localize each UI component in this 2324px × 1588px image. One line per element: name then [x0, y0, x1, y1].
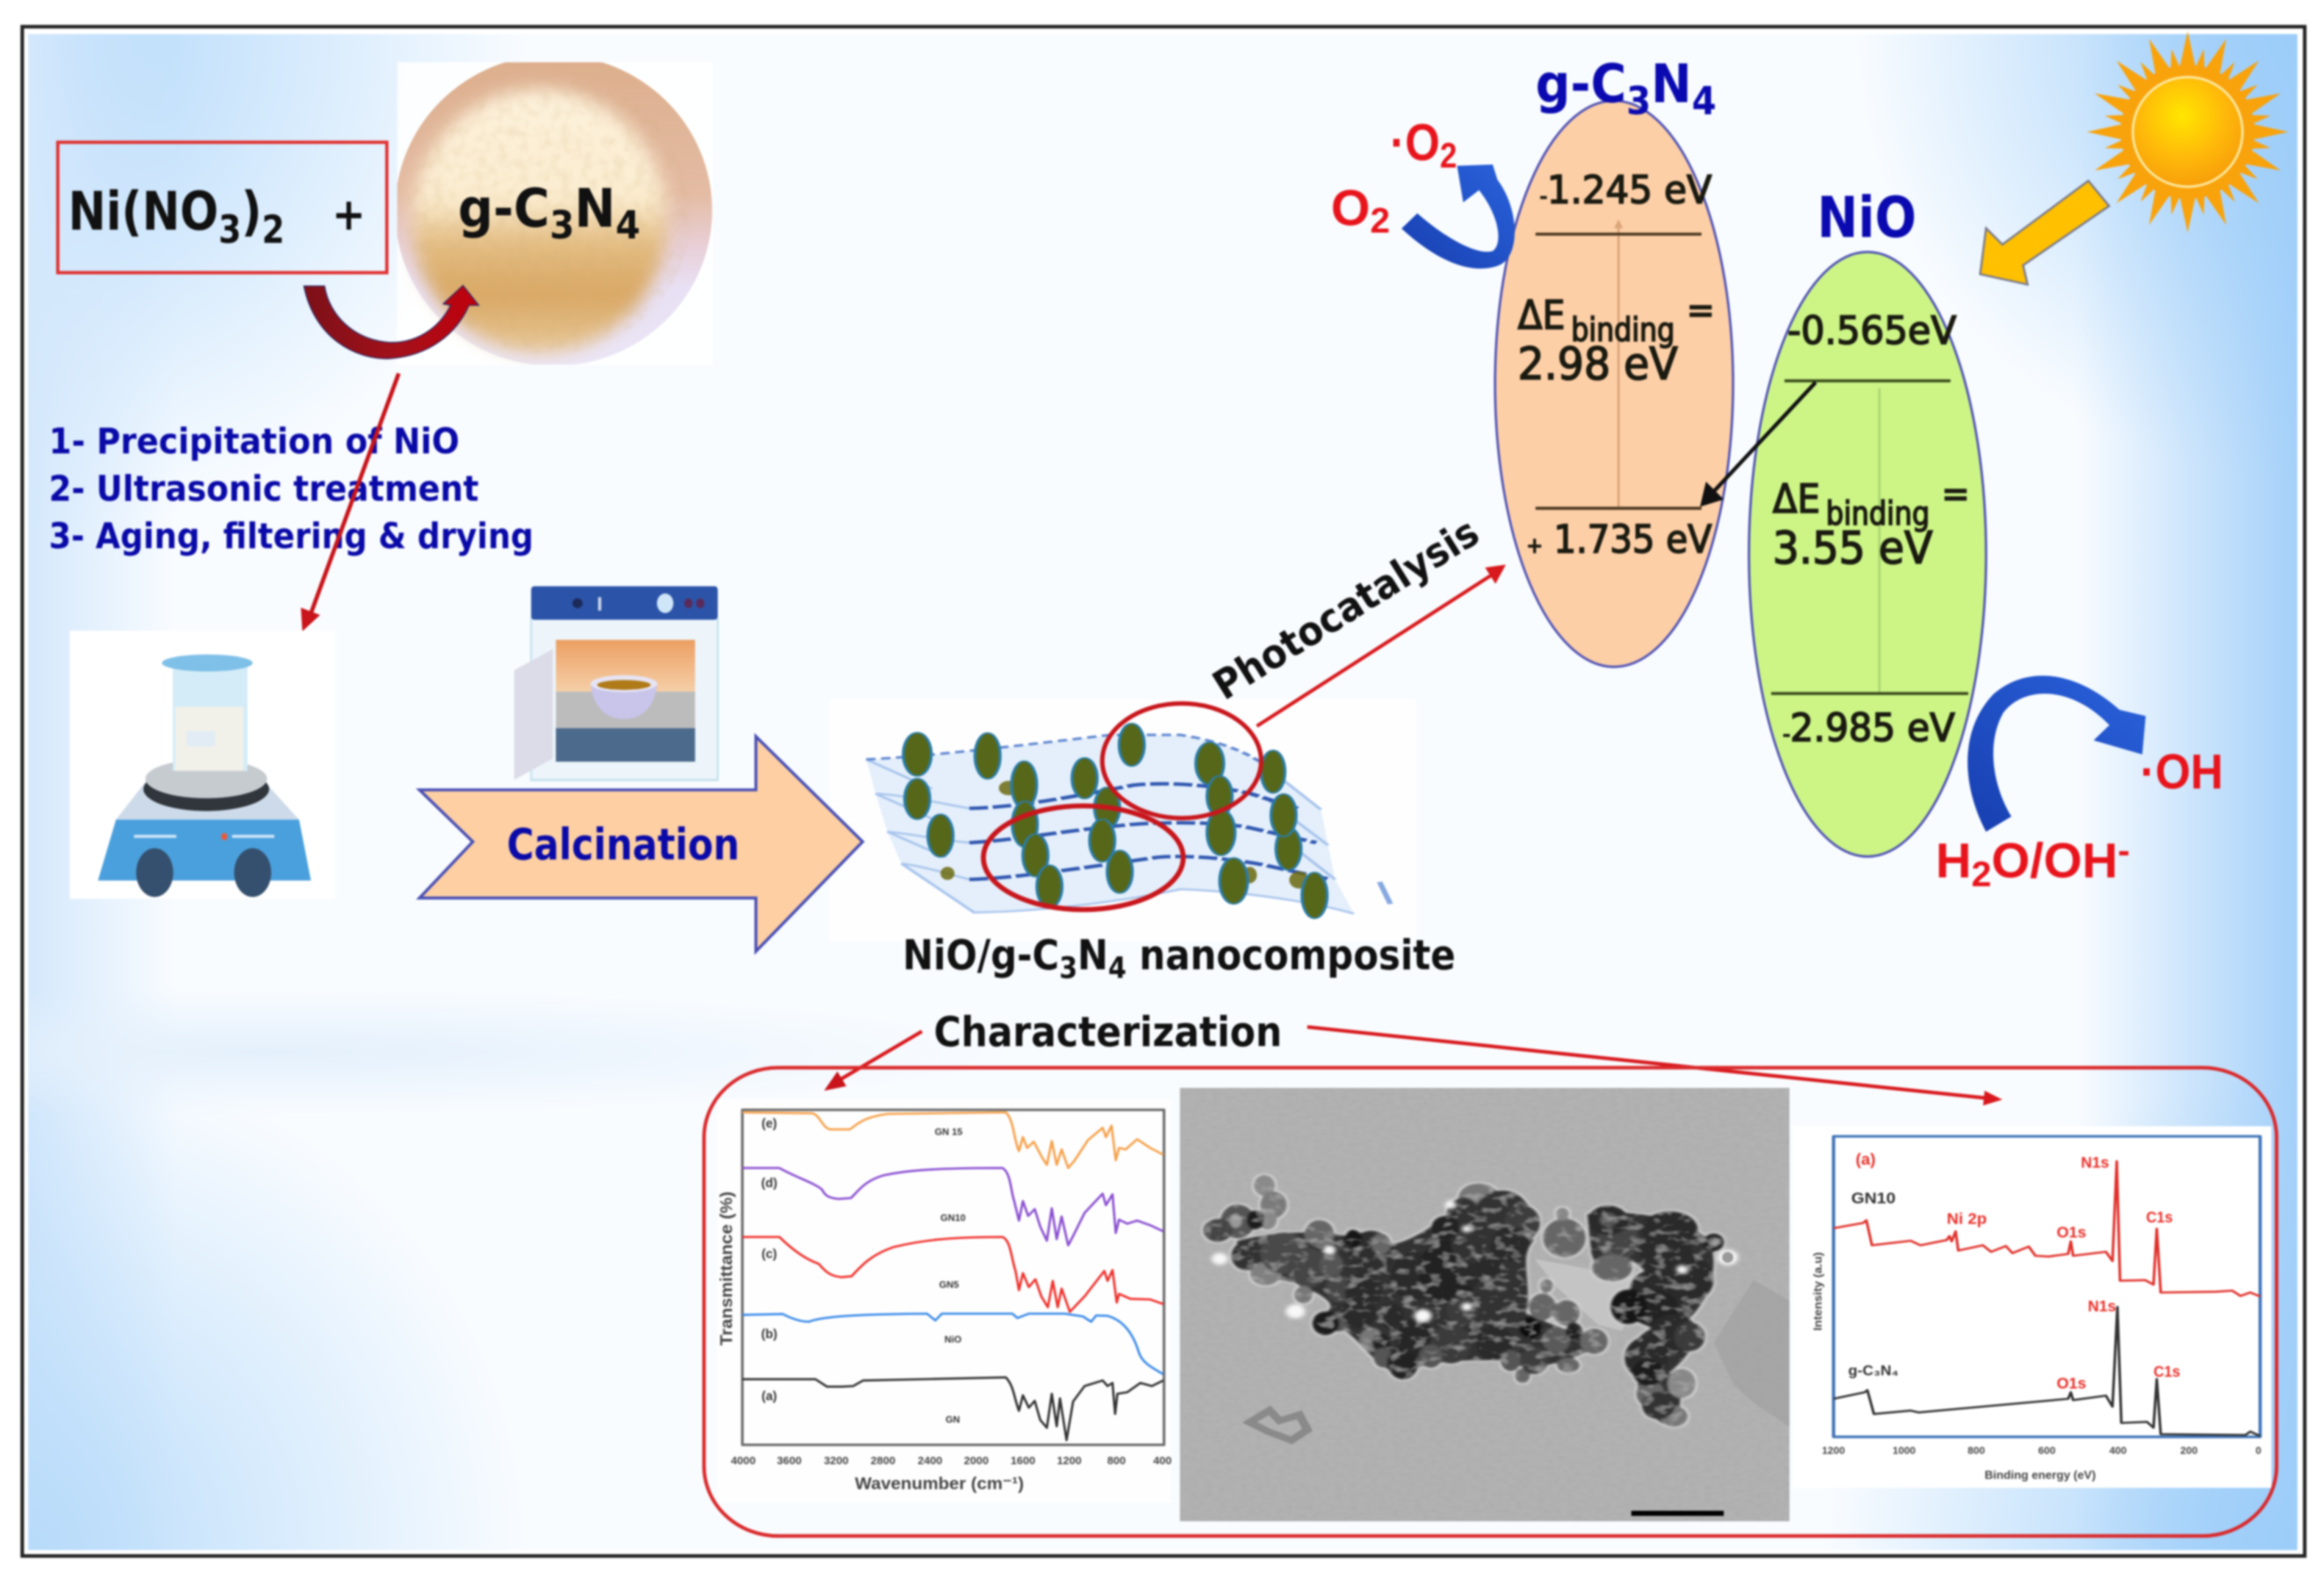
FTIR chart	[717, 1099, 1172, 1503]
XPS chart: 600	[2038, 1444, 2056, 1456]
label: O2: 2	[1370, 201, 1390, 241]
label: superoxide radical: ·O	[1391, 113, 1448, 171]
label: O2: O	[1331, 180, 1370, 237]
label: H2O/OH-: -	[2118, 831, 2130, 871]
FTIR chart: NiO	[944, 1334, 961, 1345]
NiO particles	[903, 724, 1327, 919]
XPS chart: Intensity (a.u)	[1811, 1252, 1824, 1331]
g-C3N4 powder photo: g-C	[458, 179, 548, 240]
NiO band ellipse: ΔE	[1773, 475, 1820, 522]
reagent box: nickel nitrate: +	[332, 190, 365, 241]
NiO band ellipse: -0.565eV	[1787, 309, 1957, 353]
FTIR chart: 2800	[871, 1454, 895, 1467]
caption: nanocomposite: 3	[1059, 951, 1077, 985]
FTIR chart: GN 15	[935, 1127, 963, 1138]
FTIR chart: (a)	[761, 1389, 777, 1404]
arrow: O2 reaction	[1402, 165, 1515, 269]
NiO band ellipse: 3.55 eV	[1773, 522, 1933, 574]
XPS chart: C1s	[2153, 1363, 2180, 1380]
XPS chart: GN10	[1851, 1190, 1896, 1207]
FTIR chart: GN5	[939, 1279, 959, 1290]
FTIR chart: 1200	[1057, 1454, 1082, 1467]
arrow: sunlight	[1980, 181, 2109, 284]
g-C3N4 band ellipse: -1.245 eV	[1540, 168, 1712, 212]
g-C3N4 band ellipse	[1495, 101, 1733, 667]
title: g-C3N4: N	[1651, 54, 1692, 115]
icon: magnetic stirrer	[70, 630, 335, 899]
FTIR chart: 3200	[824, 1454, 849, 1467]
reagent box: nickel nitrate: )	[241, 182, 262, 243]
process steps text: 2- Ultrasonic treatment	[49, 469, 478, 510]
FTIR chart: GN	[945, 1414, 960, 1425]
NiO band ellipse: binding	[1826, 495, 1930, 533]
TEM micrograph	[1180, 1088, 1790, 1521]
title: g-C3N4: g-C	[1535, 54, 1625, 115]
photocatalysis label: Photocatalysis	[1205, 509, 1487, 709]
XPS chart: 200	[2181, 1444, 2198, 1456]
label: superoxide radical: 2	[1440, 136, 1457, 176]
label: H2O/OH-: O/OH	[1991, 834, 2118, 888]
XPS chart: C1s	[2146, 1210, 2173, 1226]
g-C3N4 powder photo: 4	[616, 204, 640, 248]
arrow: calcination: Calcination	[507, 820, 739, 870]
heading: characterization: Characterization	[933, 1009, 1282, 1057]
arrow: photocatalysis	[1257, 564, 1506, 726]
reagent box: nickel nitrate	[58, 143, 387, 273]
g-C3N4 band ellipse: 2.98 eV	[1518, 339, 1678, 390]
XPS chart: 1200	[1822, 1444, 1845, 1456]
XPS chart: O1s	[2056, 1224, 2087, 1241]
caption: nanocomposite: NiO/g-C	[903, 932, 1061, 980]
title: g-C3N4: 4	[1692, 79, 1716, 123]
caption: nanocomposite: N	[1077, 932, 1108, 980]
XPS chart: g-C₃N₄	[1848, 1363, 1898, 1379]
XPS chart: Ni 2p	[1947, 1211, 1987, 1228]
FTIR chart: Wavenumber (cm⁻¹)	[855, 1474, 1024, 1493]
g-C3N4 band ellipse: binding	[1571, 312, 1675, 349]
graphitic sheets	[867, 735, 1391, 913]
arrow: electron transfer	[1700, 382, 1815, 507]
FTIR chart: (c)	[761, 1246, 777, 1261]
FTIR chart: (e)	[761, 1116, 777, 1131]
NiO band ellipse: =	[1942, 473, 1970, 516]
characterization panel outline	[704, 1068, 2276, 1536]
XPS chart: Binding energy (eV)	[1984, 1469, 2095, 1482]
FTIR chart: (d)	[761, 1175, 778, 1190]
arrow: to XPS	[1308, 1027, 2002, 1105]
label: hydroxyl radical: ·OH	[2140, 745, 2223, 800]
XPS chart: (a)	[1856, 1150, 1876, 1168]
NiO band ellipse: -2.985 eV	[1783, 705, 1955, 750]
g-C3N4 band ellipse: =	[1687, 289, 1715, 332]
NiO band ellipse	[1749, 252, 1986, 857]
FTIR chart: Transmittance (%)	[717, 1191, 736, 1346]
reagent box: nickel nitrate: 2	[262, 208, 284, 253]
XPS chart: N1s	[2088, 1298, 2116, 1315]
XPS chart: 1000	[1893, 1444, 1916, 1456]
nanocomposite illustration	[830, 700, 1416, 941]
FTIR chart: 2400	[918, 1454, 942, 1467]
caption: nanocomposite: 4	[1108, 951, 1127, 985]
FTIR chart: GN10	[941, 1212, 966, 1224]
FTIR chart: 2000	[964, 1454, 989, 1467]
icon: sun	[2087, 31, 2289, 233]
g-C3N4 powder photo	[395, 55, 713, 366]
reagent box: nickel nitrate: Ni(NO	[68, 182, 228, 243]
curved red arrow	[304, 285, 478, 359]
FTIR chart: 1600	[1011, 1454, 1036, 1467]
XPS chart: O1s	[2056, 1376, 2087, 1393]
g-C3N4 band ellipse: + 1.735 eV	[1527, 517, 1712, 562]
FTIR chart: 800	[1107, 1454, 1126, 1467]
title: g-C3N4: 3	[1627, 79, 1651, 123]
FTIR chart: 4000	[731, 1454, 756, 1467]
arrow: calcination	[420, 736, 863, 952]
red arrow to stirrer	[301, 373, 398, 631]
process steps text: 1- Precipitation of NiO	[49, 421, 459, 462]
XPS chart	[1793, 1127, 2271, 1488]
XPS chart: 800	[1968, 1444, 1985, 1456]
reagent box: nickel nitrate: 3	[218, 208, 241, 253]
title: NiO: NiO	[1817, 186, 1916, 251]
XPS chart: N1s	[2081, 1154, 2109, 1171]
process steps text: 3- Aging, filtering & drying	[49, 516, 534, 557]
label: H2O/OH-: 2	[1971, 855, 1991, 894]
FTIR chart: 400	[1153, 1454, 1172, 1467]
g-C3N4 powder photo: N	[575, 179, 616, 240]
XPS chart: 400	[2109, 1444, 2127, 1456]
label: H2O/OH-: H	[1936, 834, 1971, 888]
icon: furnace oven	[514, 586, 718, 780]
arrow: H2O reaction	[1968, 676, 2145, 832]
caption: nanocomposite: nanocomposite	[1127, 932, 1455, 980]
FTIR chart: 3600	[777, 1454, 802, 1467]
XPS chart: 0	[2256, 1444, 2262, 1456]
arrow: to FTIR	[824, 1032, 922, 1091]
FTIR chart: (b)	[761, 1326, 778, 1341]
process steps text	[49, 421, 534, 557]
g-C3N4 powder photo: 3	[550, 204, 575, 248]
g-C3N4 band ellipse: ΔE	[1518, 292, 1565, 339]
